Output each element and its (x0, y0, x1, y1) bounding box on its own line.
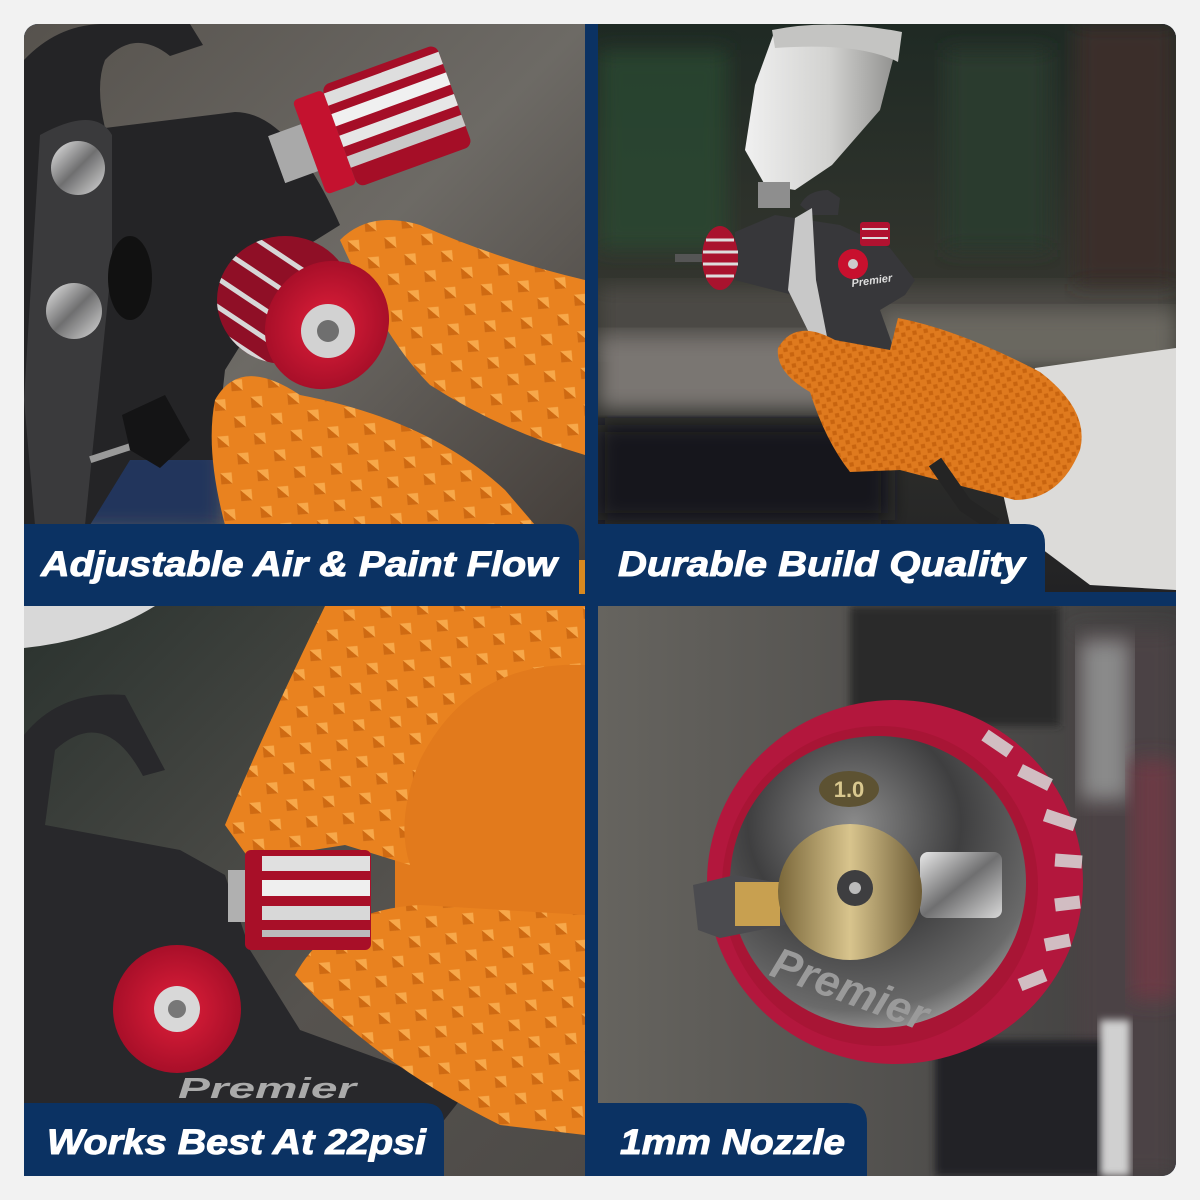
caption: 1mm nozzle: 1mm Nozzle (620, 1122, 845, 1162)
photo: gloved hand (778, 318, 1082, 500)
caption: works best at 22psi: Works Best At 22psi (47, 1122, 427, 1162)
photo: top red knob (268, 46, 470, 194)
photo: red nozzle collar (707, 700, 1083, 1064)
photo: front red knob (217, 236, 389, 390)
panel: 1mm nozzle (598, 606, 1176, 1176)
photo: horizontal red knob (228, 850, 371, 950)
photo: white sleeve (1000, 348, 1176, 590)
photo: gun body (24, 24, 340, 525)
photo: chrome horns (693, 852, 1002, 938)
caption: adjustable air and paint flow: Adjustable Air & Paint Flow (40, 544, 560, 584)
size marking (819, 771, 879, 807)
panel: works best at 22psi (24, 606, 585, 1176)
photo: spray gun: Premier (851, 272, 894, 290)
photo: orange sliver beside caption (579, 560, 585, 594)
photo: gun body (24, 694, 458, 1120)
panel: adjustable air and paint flow (24, 24, 585, 594)
photo: orange glove fingers (212, 220, 585, 525)
caption: 1mm nozzle (586, 1103, 867, 1176)
caption: adjustable air and paint flow (24, 524, 579, 605)
caption: works best at 22psi (24, 1103, 444, 1176)
photo: spray gun (675, 190, 913, 350)
photo: paint cup (745, 24, 902, 208)
panel: durable build quality (598, 24, 1176, 594)
photo: chrome air cap (730, 736, 1026, 1028)
photo: air hose (928, 458, 961, 486)
photo: orange glove (225, 606, 585, 1135)
photo: brass nozzle (778, 824, 922, 960)
size marking: 1.0 (834, 777, 864, 802)
photo: round red knob (113, 945, 241, 1073)
engraved brand: Premier (765, 938, 938, 1041)
caption: durable build quality (586, 524, 1176, 605)
brand lettering: Premier (178, 1073, 359, 1105)
caption: durable build quality: Durable Build Quality (618, 544, 1028, 584)
